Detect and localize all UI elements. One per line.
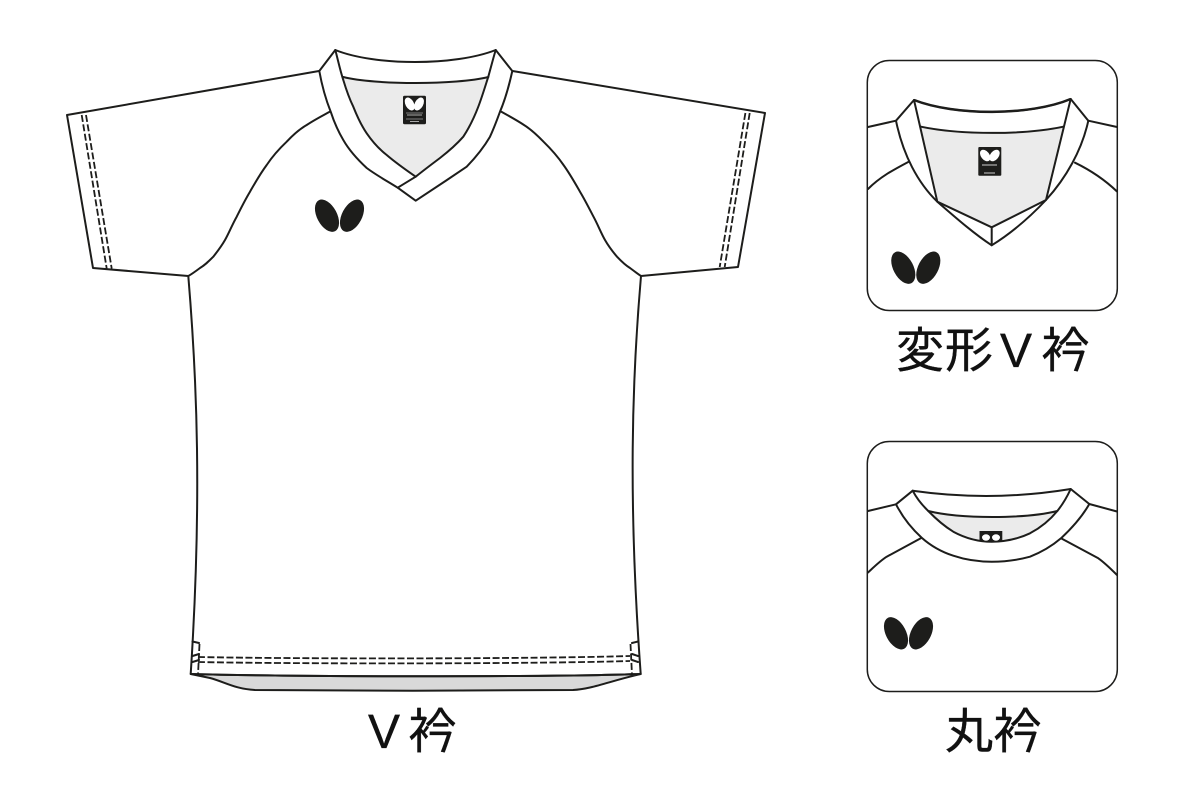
chest logo xyxy=(879,613,938,653)
inner back neck xyxy=(928,511,1057,542)
neck label xyxy=(978,147,1002,176)
panel: modified V collar xyxy=(867,60,1117,310)
panel: round collar xyxy=(867,442,1117,692)
shoulder and raglan lines xyxy=(868,504,1117,575)
right raglan seam xyxy=(500,111,641,276)
caption: round collar: 丸衿 xyxy=(945,706,1042,759)
caption: modified V collar: 変形V衿 xyxy=(896,325,1090,378)
modified V collar band xyxy=(896,99,1088,245)
hem underside xyxy=(191,674,641,691)
shoulder and raglan lines xyxy=(868,121,1117,192)
collar xyxy=(319,50,512,201)
chest logo xyxy=(886,248,945,288)
chest logo xyxy=(310,196,369,236)
neck label xyxy=(980,531,1002,541)
left raglan seam xyxy=(188,111,331,276)
inner back neck xyxy=(921,127,1063,227)
neck label xyxy=(403,96,426,124)
round collar band xyxy=(896,489,1089,562)
caption: V collar: V衿 xyxy=(368,706,457,759)
main shirt: V collar xyxy=(67,50,765,691)
hem stitching xyxy=(192,642,638,675)
shirt outline xyxy=(67,71,765,676)
sleeve stitching xyxy=(82,113,750,268)
